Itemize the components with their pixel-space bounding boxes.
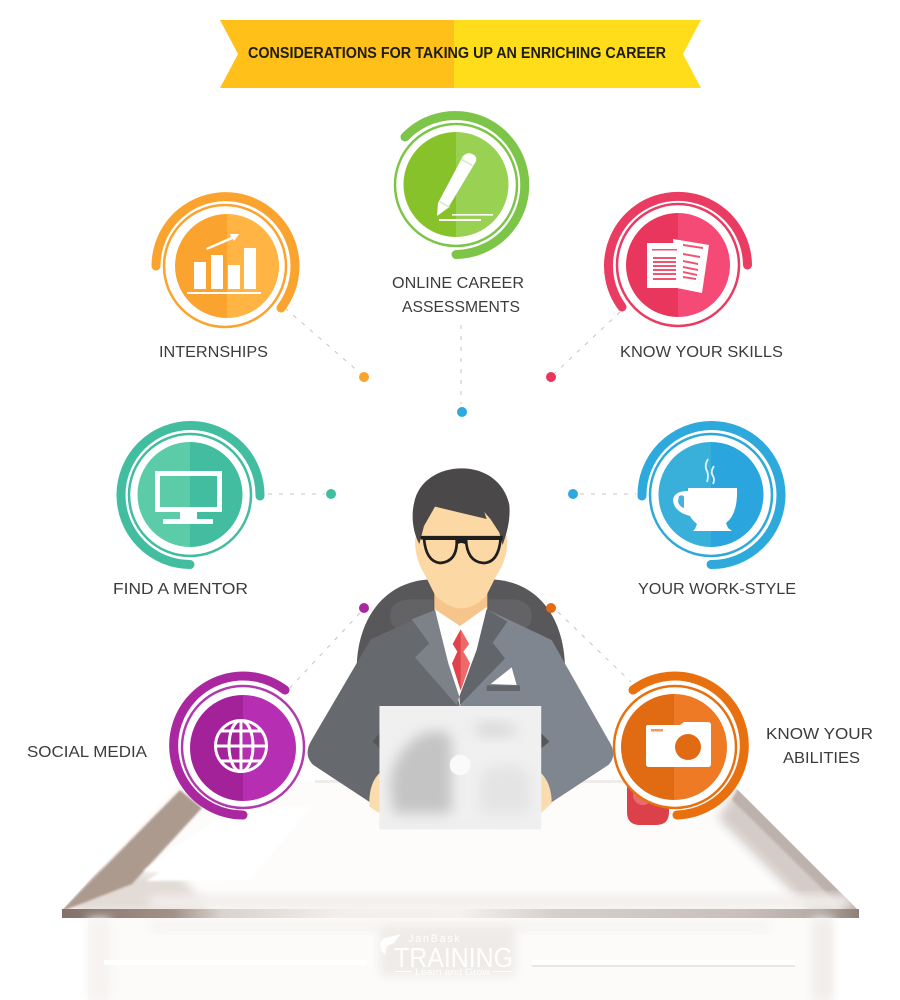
badge: your work-style — [642, 426, 781, 565]
elbow notches — [373, 733, 379, 748]
logo — [380, 933, 513, 977]
icon: bar chart — [187, 234, 261, 294]
label: know your abilities — [766, 726, 873, 767]
chair — [357, 579, 565, 670]
hands — [369, 773, 552, 814]
label: internships: INTERNSHIPS — [159, 344, 268, 361]
label: online career assessments: ASSESSMENTS — [402, 299, 520, 316]
connector lines — [268, 308, 636, 690]
badge: social media — [174, 676, 304, 815]
badge: know your abilities — [614, 676, 744, 815]
icon: open document — [647, 239, 709, 293]
tie — [452, 629, 470, 691]
red mug — [627, 775, 669, 825]
node: assessments — [457, 407, 467, 417]
node: mentor — [326, 489, 336, 499]
icon: monitor — [158, 474, 220, 524]
node: abilities — [546, 603, 556, 613]
logo: TRAINING — [394, 942, 513, 973]
icon: steaming cup — [673, 459, 737, 531]
badge: internships — [156, 197, 295, 327]
desk — [60, 780, 862, 1000]
node: work-style — [568, 489, 578, 499]
label: know your skills: KNOW YOUR SKILLS — [620, 344, 783, 361]
laptop — [378, 706, 543, 830]
face — [415, 503, 507, 608]
logo: Learn and Grow — [415, 967, 491, 977]
badge: know your skills — [609, 196, 748, 326]
icon: globe — [216, 720, 266, 772]
label: your work-style: YOUR WORK-STYLE — [638, 581, 796, 598]
node: internships — [359, 372, 369, 382]
icon: pencil — [437, 153, 493, 221]
paper on desk — [143, 807, 311, 881]
label: online career assessments: ONLINE CAREER — [392, 275, 524, 292]
label: find a mentor: FIND A MENTOR — [113, 581, 248, 598]
node: social media — [359, 603, 369, 613]
title ribbon — [220, 20, 701, 88]
pocket — [491, 667, 517, 685]
label: know your abilities: KNOW YOUR — [766, 726, 873, 743]
hair — [413, 468, 510, 545]
jacket left — [308, 610, 460, 803]
label: know your abilities: ABILITIES — [783, 750, 860, 767]
badge: find a mentor — [121, 426, 260, 564]
title ribbon: CONSIDERATIONS FOR TAKING UP AN ENRICHING CAREER — [248, 45, 666, 62]
logo: JanBask — [408, 933, 460, 945]
shirt front — [435, 607, 487, 697]
label: social media: SOCIAL MEDIA — [27, 744, 147, 761]
icon: camera — [646, 722, 711, 767]
node: skills — [546, 372, 556, 382]
badge: online career assessments — [395, 116, 525, 254]
man at laptop — [308, 468, 613, 830]
neck — [434, 590, 487, 628]
glasses — [421, 538, 503, 563]
lapels — [412, 610, 459, 705]
jacket right — [460, 609, 613, 803]
label: online career assessments — [392, 275, 524, 316]
